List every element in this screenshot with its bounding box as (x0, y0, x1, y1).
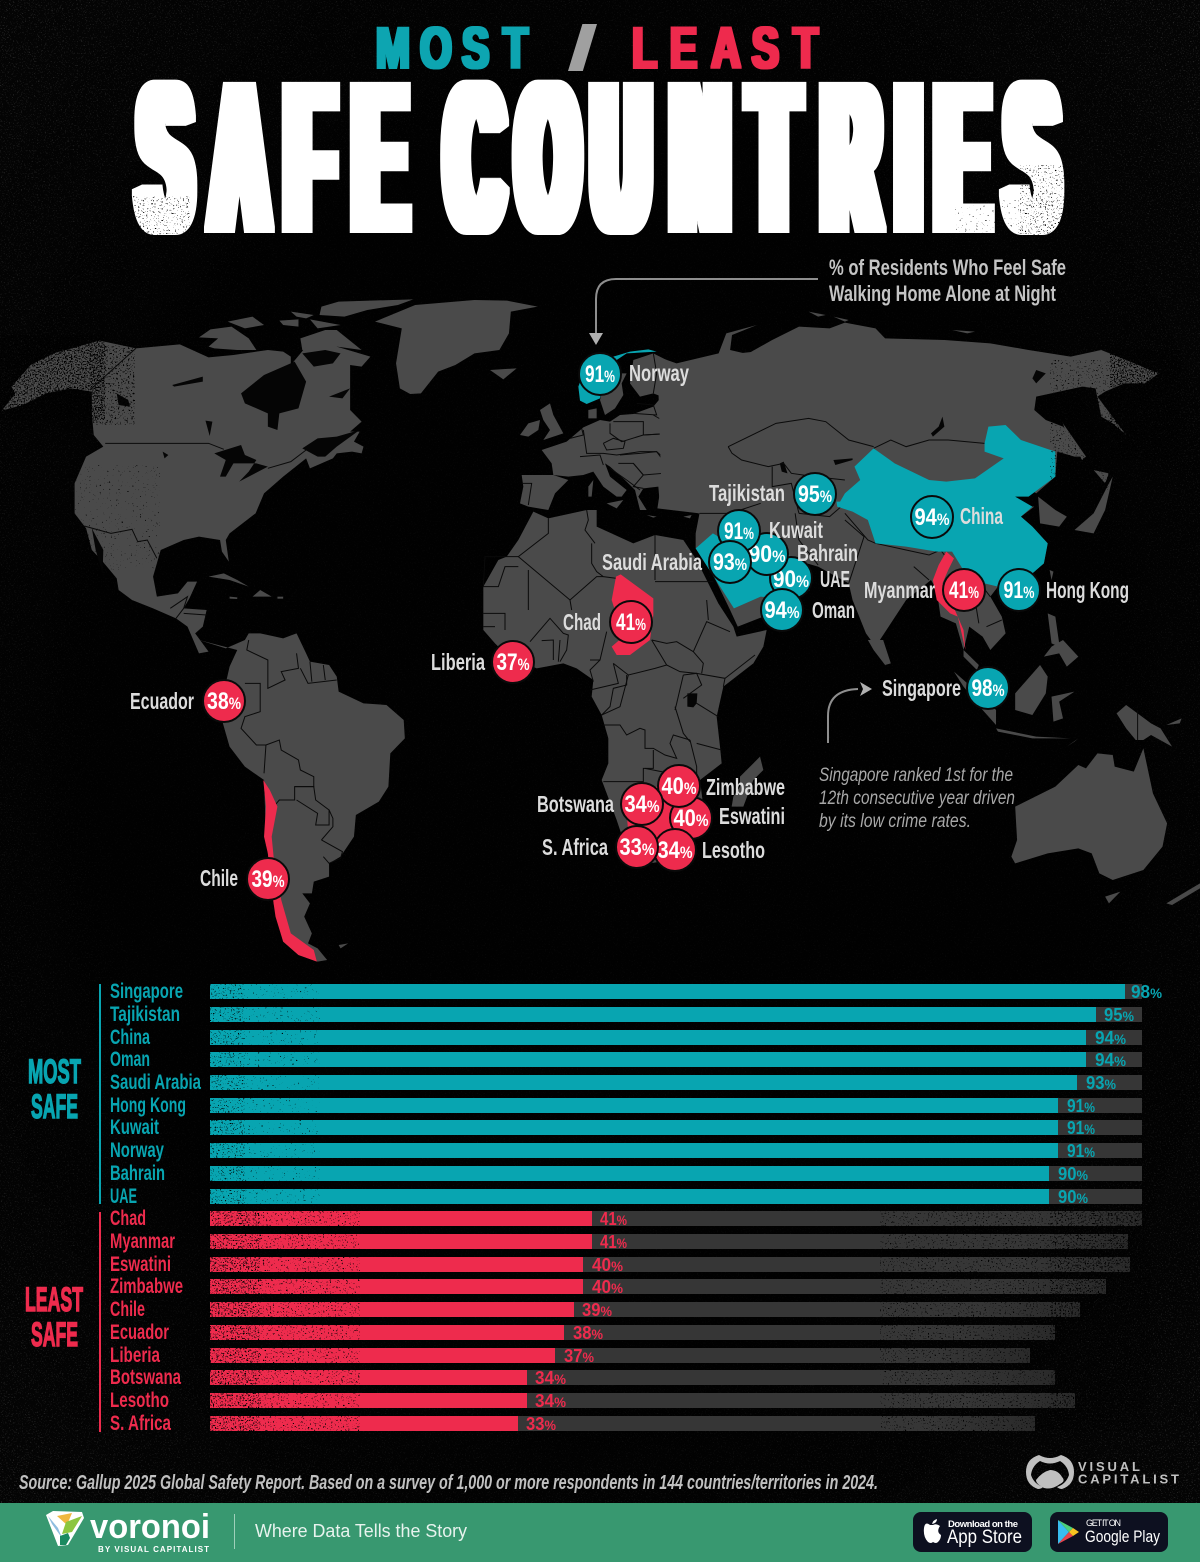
row: uae (110, 1185, 1089, 1208)
map value bubbles: 38% (207, 688, 241, 715)
row: zimbabwe (110, 1275, 624, 1298)
map labels: Kuwait (769, 517, 823, 543)
callout: metric description: % of Residents Who Feel Safe (829, 255, 1066, 280)
map value bubbles: 94% (764, 597, 800, 624)
row: china: 94% (1095, 1028, 1127, 1048)
map value bubbles (203, 353, 1040, 900)
map labels: Chad (563, 609, 601, 635)
title: most / least: MOST (376, 15, 528, 81)
africa (483, 510, 767, 863)
row: tajikistan: 95% (1104, 1005, 1135, 1025)
visual capitalist logo: VISUAL (1078, 1459, 1140, 1474)
row: china: China (110, 1026, 150, 1049)
app store badge: Download on the (948, 1519, 1018, 1530)
note: singapore: by its low crime rates. (819, 811, 971, 832)
row: oman (110, 1048, 1127, 1071)
tracks (515, 1211, 1142, 1431)
map labels: S. Africa (542, 834, 608, 860)
map value bubbles: 91% (724, 518, 754, 545)
row: lesotho: Lesotho (110, 1389, 169, 1412)
google play badge: GET IT ON (1086, 1518, 1121, 1528)
row: chad (110, 1207, 627, 1230)
highlighted countries: southern africa (627, 787, 683, 860)
row: botswana: 34% (535, 1368, 567, 1388)
map labels (130, 360, 1129, 891)
asia (657, 312, 1159, 650)
row: oman: Oman (110, 1048, 150, 1071)
map value bubbles: 94% (914, 504, 950, 531)
map value bubbles: 91% (1004, 577, 1034, 604)
row: south africa (110, 1412, 557, 1435)
highlighted country: tajikistan (836, 502, 847, 507)
highlighted country: norway (578, 349, 657, 404)
title: most / least: / (569, 15, 597, 82)
map value bubbles: 95% (798, 481, 832, 508)
map labels: Bahrain (797, 540, 858, 566)
map labels: Chile (200, 865, 238, 891)
visual capitalist logo (1026, 1455, 1179, 1489)
row: hong kong (110, 1094, 1095, 1117)
north america (2, 299, 538, 653)
map labels: Tajikistan (709, 480, 785, 506)
map value bubbles: 34% (658, 837, 692, 864)
row: bahrain: 90% (1058, 1164, 1089, 1184)
row: myanmar: 41% (600, 1232, 627, 1252)
google play badge (1050, 1512, 1168, 1552)
row: kuwait (110, 1116, 1095, 1139)
oceania and southeast asia (868, 640, 1200, 905)
row: uae: 90% (1058, 1187, 1089, 1207)
row: uae: UAE (110, 1185, 137, 1208)
row: chad: 41% (600, 1209, 627, 1229)
group heading: least safe (25, 1281, 83, 1354)
map value bubbles: 91% (585, 361, 615, 388)
row: botswana: Botswana (110, 1366, 181, 1389)
note: singapore: 12th consecutive year driven (819, 788, 1015, 809)
row: tajikistan: Tajikistan (110, 1003, 180, 1026)
voronoi logo: BY VISUAL CAPITALIST (98, 1545, 209, 1554)
row: singapore: 98% (1131, 982, 1163, 1002)
callout: metric description (829, 255, 1066, 306)
map labels: UAE (820, 566, 850, 592)
highlighted country: china (837, 425, 1055, 587)
row: botswana (110, 1366, 567, 1389)
row: hong kong: 91% (1067, 1096, 1095, 1116)
group heading: most safe (28, 1053, 81, 1126)
map value bubbles: 33% (620, 834, 654, 861)
voronoi logo: voronoi (90, 1508, 210, 1546)
row: kuwait: 91% (1067, 1118, 1095, 1138)
map value bubbles: 40% (674, 805, 708, 832)
map value bubbles: 90% (773, 566, 809, 593)
map labels: Hong Kong (1046, 577, 1129, 603)
row: liberia: Liberia (110, 1344, 160, 1367)
note: singapore (819, 765, 1015, 832)
row: south africa: 33% (526, 1414, 557, 1434)
row: singapore (110, 980, 1163, 1003)
map value bubbles: 37% (496, 649, 530, 676)
row: south africa: S. Africa (110, 1412, 171, 1435)
callout: metric description: Walking Home Alone at Night (829, 281, 1056, 306)
map value bubbles: 93% (713, 549, 747, 576)
title: most / least (376, 15, 818, 82)
row: zimbabwe: 40% (592, 1277, 624, 1297)
row: chile: Chile (110, 1298, 145, 1321)
map labels: Zimbabwe (706, 774, 785, 800)
map labels: Oman (812, 597, 855, 623)
row: oman: 94% (1095, 1050, 1127, 1070)
row: eswatini (110, 1253, 624, 1276)
note: singapore: Singapore ranked 1st for the (819, 765, 1013, 786)
row: norway: Norway (110, 1139, 164, 1162)
visual capitalist logo: CAPITALIST (1078, 1472, 1179, 1486)
row: ecuador: Ecuador (110, 1321, 169, 1344)
tracks (210, 984, 1142, 1204)
map value bubbles: 41% (616, 609, 646, 636)
voronoi logo (46, 1508, 210, 1554)
map value bubbles: 90% (748, 541, 786, 568)
row: saudi arabia: 93% (1086, 1073, 1117, 1093)
south america (199, 633, 405, 962)
row: saudi arabia (110, 1071, 1117, 1094)
app store badge (913, 1512, 1032, 1552)
map value bubbles: 40% (662, 773, 696, 800)
map value bubbles: 39% (252, 866, 284, 893)
row: lesotho: 34% (535, 1391, 567, 1411)
arrow: singapore note (828, 682, 872, 743)
source note: Source: Gallup 2025 Global Safety Report. Based on a survey of 1,000 or more respondents in 144 countries/territories in 2024. (19, 1472, 878, 1494)
row: kuwait: Kuwait (110, 1116, 159, 1139)
group heading: least safe: LEAST (25, 1281, 83, 1319)
group heading: most safe: MOST (28, 1053, 81, 1091)
row: china (110, 1026, 1127, 1049)
row: bahrain: Bahrain (110, 1162, 165, 1185)
row: chad: Chad (110, 1207, 146, 1230)
map value bubbles: 98% (972, 675, 1004, 702)
map labels: Norway (629, 360, 689, 386)
world map (2, 299, 1200, 962)
row: liberia: 37% (564, 1346, 595, 1366)
highlighted country: myanmar (933, 552, 965, 650)
google play badge: Google Play (1085, 1527, 1160, 1546)
group heading: most safe: SAFE (31, 1088, 78, 1126)
europe (490, 350, 770, 518)
row: norway: 91% (1067, 1141, 1095, 1161)
bar chart: least safe (25, 1207, 1142, 1435)
row: zimbabwe: Zimbabwe (110, 1275, 183, 1298)
map labels: Eswatini (719, 803, 785, 829)
footer band (0, 1503, 1200, 1562)
map value bubbles: 34% (624, 791, 660, 818)
map labels: Ecuador (130, 688, 194, 714)
title: most / least: LEAST (632, 15, 818, 81)
row: myanmar (110, 1230, 627, 1253)
row: saudi arabia: Saudi Arabia (110, 1071, 201, 1094)
row: ecuador: 38% (573, 1323, 604, 1343)
map labels: Singapore (882, 675, 961, 701)
arrow: callout to map (589, 279, 818, 345)
highlighted country: chad (612, 574, 653, 655)
row: eswatini: Eswatini (110, 1253, 171, 1276)
group heading: least safe: SAFE (31, 1316, 78, 1354)
map labels: Lesotho (702, 837, 765, 863)
tagline: Where Data Tells the Story (255, 1521, 467, 1541)
app store badge: App Store (947, 1527, 1022, 1548)
row: lesotho (110, 1389, 567, 1412)
row: chile: 39% (582, 1300, 613, 1320)
row: bahrain (110, 1162, 1089, 1185)
map labels: China (960, 503, 1003, 529)
row: tajikistan (110, 1003, 1135, 1026)
row: ecuador (110, 1321, 604, 1344)
row: myanmar: Myanmar (110, 1230, 175, 1253)
bar chart: most safe (28, 980, 1163, 1208)
row: norway (110, 1139, 1095, 1162)
row: liberia (110, 1344, 595, 1367)
map labels: Botswana (537, 791, 614, 817)
highlighted countries: middle east (696, 533, 810, 608)
title: safe countries: SAFE COUNTRIES (140, 38, 1057, 275)
row: hong kong: Hong Kong (110, 1094, 186, 1117)
row: eswatini: 40% (592, 1255, 624, 1275)
map labels: Saudi Arabia (602, 549, 702, 575)
map value bubbles: 41% (949, 577, 979, 604)
row: chile (110, 1298, 613, 1321)
row: singapore: Singapore (110, 980, 183, 1003)
map labels: Liberia (431, 649, 485, 675)
map labels: Myanmar (864, 577, 935, 603)
